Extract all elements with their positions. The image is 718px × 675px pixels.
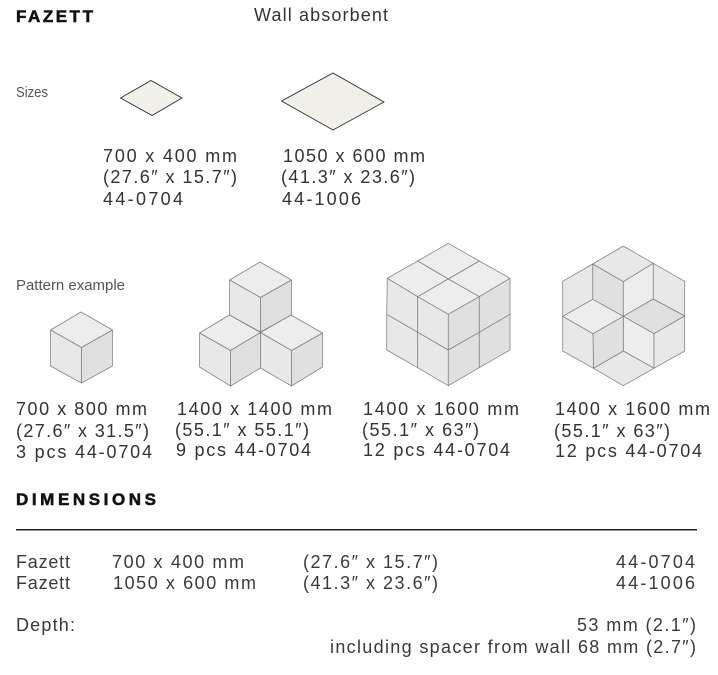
- table: dimensions: (41.3″ x 23.6″): [303, 573, 438, 593]
- text: small size: [103, 146, 237, 209]
- title: FAZETT: [16, 7, 94, 26]
- text: pattern 4: (55.1″ x 63″): [554, 421, 670, 441]
- text: pattern 2: 1400 x 1400 mm: [177, 399, 332, 419]
- text: pattern 1: 3 pcs 44-0704: [16, 442, 152, 462]
- text: pattern 1: (27.6″ x 31.5″): [16, 421, 149, 441]
- label: pattern example: Pattern example: [16, 278, 125, 294]
- text: depth: 53 mm (2.1″): [577, 615, 696, 635]
- text: pattern 1: 700 x 800 mm: [16, 399, 147, 419]
- text: pattern 2: 9 pcs 44-0704: [176, 440, 311, 460]
- text: depth: Depth:: [16, 615, 75, 635]
- text: pattern 4: 12 pcs 44-0704: [555, 441, 702, 461]
- table: dimensions: Fazett: [16, 552, 70, 572]
- icon: small panel: [120, 80, 182, 116]
- text: pattern 3: 1400 x 1600 mm: [363, 399, 519, 419]
- text: large size: (41.3″ x 23.6″): [281, 167, 415, 187]
- text: large size: 1050 x 600 mm: [283, 146, 425, 166]
- text: pattern 4: 1400 x 1600 mm: [555, 399, 710, 419]
- table: dimensions: Fazett: [16, 573, 70, 593]
- icon: large panel: [282, 73, 384, 130]
- pattern: single cube: [50, 312, 112, 383]
- text: pattern 2: [175, 399, 332, 460]
- text: small size: 700 x 400 mm: [103, 146, 237, 166]
- table: dimensions: 1050 x 600 mm: [113, 573, 256, 593]
- table: dimensions: 700 x 400 mm: [112, 552, 244, 572]
- text: pattern 4: [554, 399, 710, 461]
- text: pattern 3: (55.1″ x 63″): [362, 420, 479, 440]
- table: dimensions: 44-1006: [616, 573, 695, 593]
- text: pattern 2: (55.1″ x 55.1″): [175, 420, 309, 440]
- text: depth: [16, 615, 696, 657]
- table: dimensions: [16, 552, 695, 593]
- text: pattern 1: [16, 399, 152, 462]
- pattern: star hexagon: [563, 246, 685, 386]
- table: dimensions: (27.6″ x 15.7″): [303, 552, 438, 572]
- text: pattern 3: [362, 399, 519, 460]
- text: small size: 44-0704: [103, 189, 183, 209]
- heading: dimensions: DIMENSIONS: [16, 490, 156, 509]
- text: large size: [281, 146, 425, 209]
- text: small size: (27.6″ x 15.7″): [103, 167, 237, 187]
- text: large size: 44-1006: [282, 189, 361, 209]
- label: sizes: Sizes: [16, 85, 48, 101]
- text: pattern 3: 12 pcs 44-0704: [363, 440, 510, 460]
- text: depth: including spacer from wall 68 mm (2.7″): [330, 637, 696, 657]
- pattern: large cube: [387, 243, 510, 386]
- pattern: three cubes: [200, 262, 322, 386]
- subtitle: Wall absorbent: [254, 5, 388, 25]
- table: dimensions: 44-0704: [616, 552, 695, 572]
